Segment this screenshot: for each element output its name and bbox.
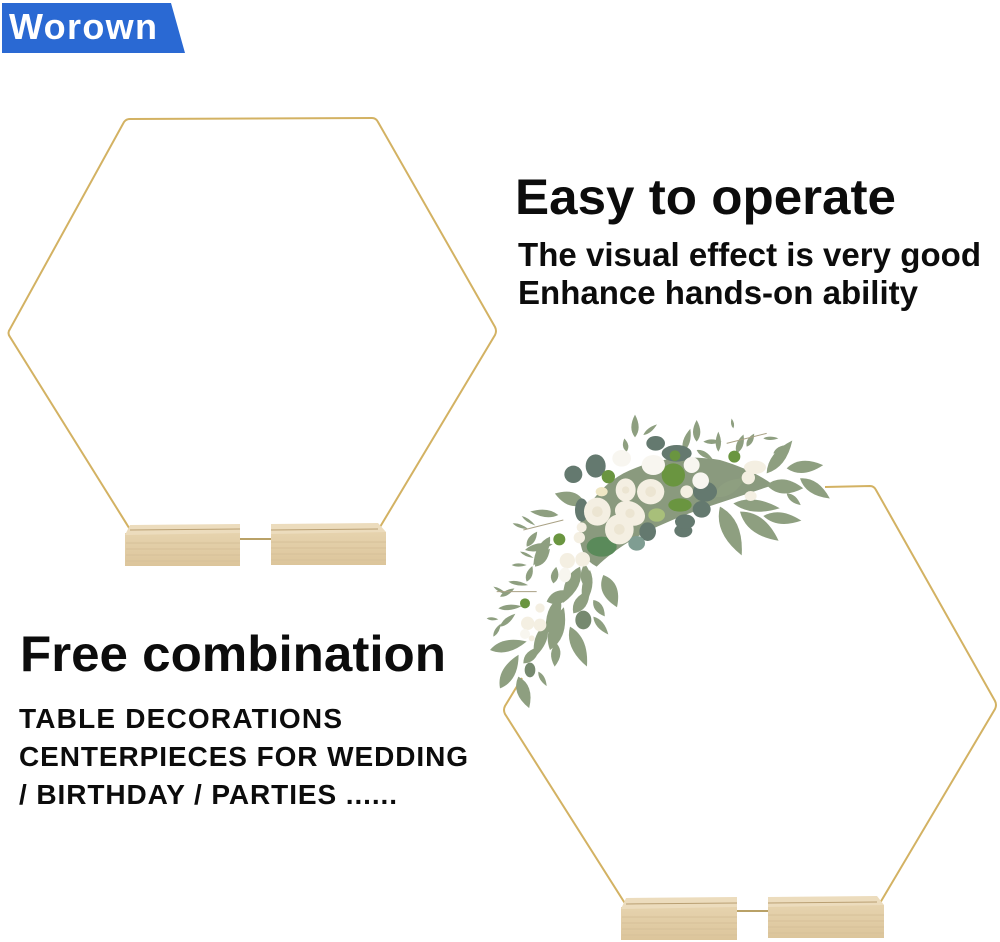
foliage mass <box>580 458 773 567</box>
brand badge: Worown: Worown <box>9 6 157 47</box>
floral garland <box>487 415 833 710</box>
text block: usage description: TABLE DECORATIONS <box>19 703 342 734</box>
text block: usage description <box>19 703 468 810</box>
heading: Free combination: Free combination <box>20 626 446 682</box>
text block: usage description: / BIRTHDAY / PARTIES ...... <box>19 779 397 810</box>
wooden base left block <box>125 524 240 566</box>
wooden base left block <box>621 897 737 940</box>
product: empty gold hexagon hoop on wooden bases <box>8 118 496 566</box>
text block: operate description: The visual effect is very good <box>518 236 981 273</box>
brand badge: Worown <box>2 3 185 53</box>
text block: operate description: Enhance hands-on ability <box>518 274 919 311</box>
stems <box>497 433 767 592</box>
eucalyptus leaves <box>525 436 717 677</box>
flower shading <box>592 486 656 535</box>
sage leaves <box>487 415 833 710</box>
wooden base right block <box>271 523 386 565</box>
text block: operate description <box>518 236 981 311</box>
bright green buds <box>520 450 740 608</box>
heading: Easy to operate: Easy to operate <box>515 169 896 225</box>
product: gold hexagon hoop with floral garland <box>487 415 996 940</box>
white flowers <box>520 450 766 641</box>
wooden base right block <box>768 896 884 938</box>
text block: usage description: CENTERPIECES FOR WEDDING <box>19 741 468 772</box>
